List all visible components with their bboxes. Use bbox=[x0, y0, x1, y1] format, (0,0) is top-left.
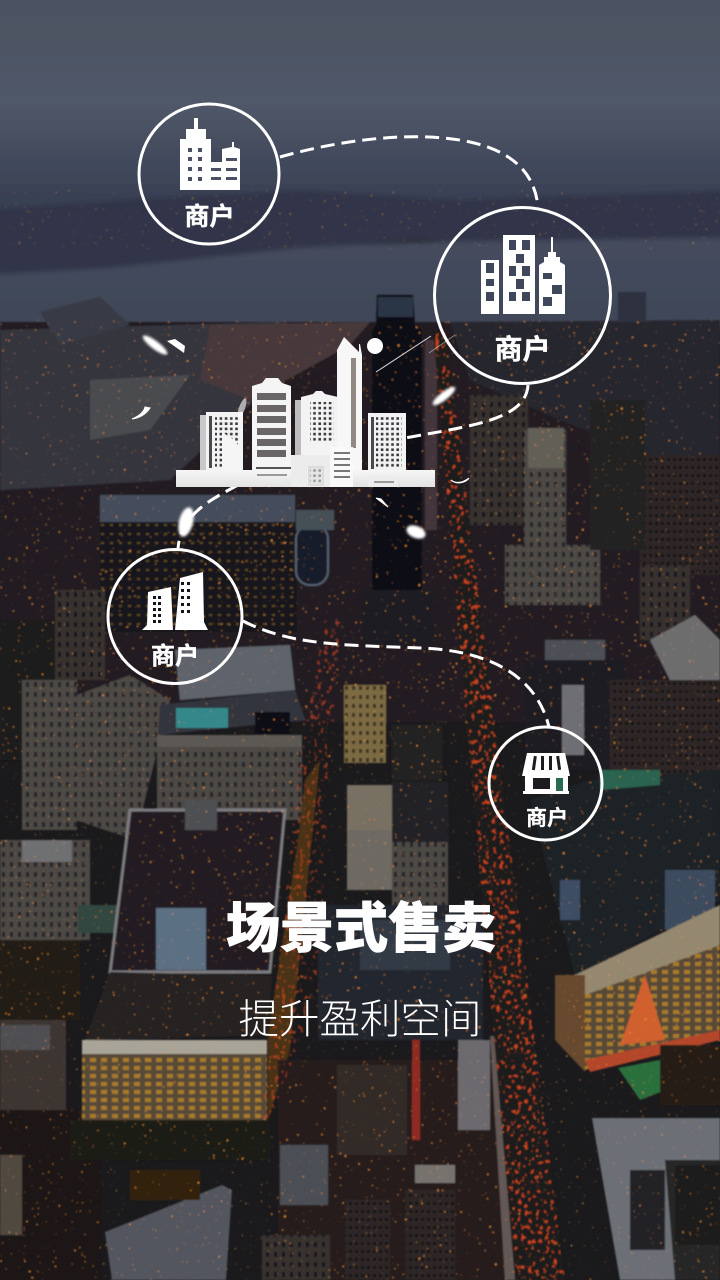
building left bbox=[200, 412, 243, 470]
mid building with bluish roof bbox=[175, 645, 295, 700]
bottom-left roof bbox=[105, 1185, 232, 1280]
merchant badge: right bbox=[489, 727, 602, 840]
large roof-top block bbox=[85, 810, 285, 1040]
label: 商户 bbox=[494, 334, 551, 365]
base platform bbox=[176, 470, 435, 487]
label: 商户 bbox=[184, 203, 235, 231]
icon: shop front bbox=[522, 753, 570, 794]
label: 商户 bbox=[151, 643, 199, 670]
label: 商户 bbox=[526, 807, 568, 830]
small front building bbox=[222, 432, 242, 484]
right building bbox=[368, 413, 406, 471]
sky, far shore and river bbox=[0, 0, 720, 330]
merchant badge: top left bbox=[139, 104, 279, 244]
centre tan + cream towers bbox=[344, 685, 386, 763]
tall tower bbox=[337, 337, 362, 487]
upper-city mass bbox=[0, 322, 720, 722]
mid building bbox=[295, 391, 338, 470]
icon: twin slanted towers bbox=[142, 572, 208, 630]
lower-left buildings bbox=[0, 840, 90, 940]
central city illustration bbox=[176, 337, 435, 487]
bottom-right roof bbox=[592, 1118, 720, 1280]
petals and sparkles bbox=[132, 333, 469, 541]
icon: three towers bbox=[481, 235, 565, 314]
icon: office buildings bbox=[180, 118, 240, 190]
left large block bbox=[100, 495, 295, 523]
black tower centre bbox=[372, 295, 422, 590]
subtitle: 提升盈利空间 bbox=[238, 996, 482, 1042]
right skyline towers bbox=[470, 395, 528, 525]
tall striped building bbox=[252, 378, 291, 487]
dashed connector lines bbox=[178, 137, 549, 727]
merchant badge: left bbox=[108, 550, 242, 684]
left small buildings bbox=[55, 590, 105, 680]
street lights bbox=[434, 339, 565, 1280]
thin light streaks bbox=[376, 335, 455, 372]
title: 场景式售卖 bbox=[226, 899, 496, 959]
low front blocks bbox=[252, 447, 398, 487]
bottom-centre building bbox=[278, 1060, 523, 1280]
merchant badge: top right bbox=[434, 208, 610, 384]
macy's block bbox=[530, 770, 720, 975]
